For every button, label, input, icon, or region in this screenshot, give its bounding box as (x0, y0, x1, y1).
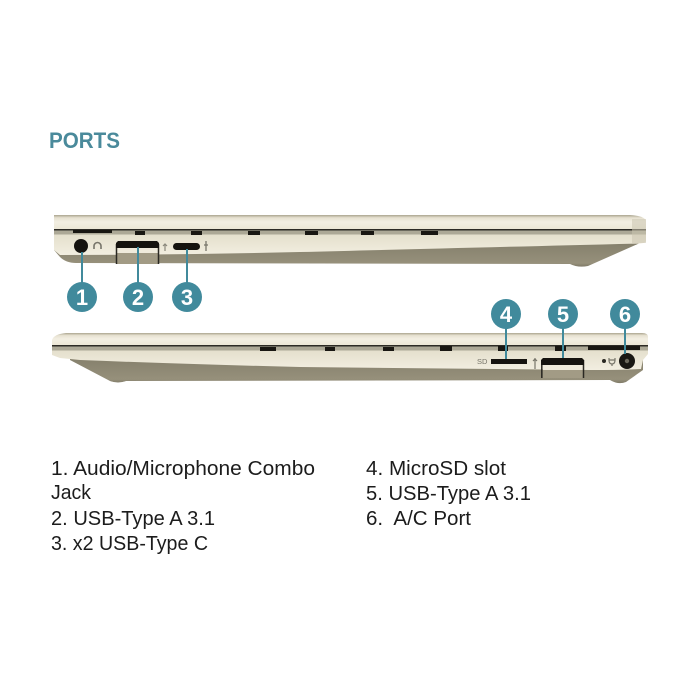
port list: left column: Jack (51, 482, 92, 504)
laptop base (54, 234, 646, 255)
callout 3 (172, 249, 202, 312)
callout 5: 5 (557, 302, 569, 327)
hinge gap (54, 229, 646, 230)
port list: right column: 4. MicroSD slot (366, 458, 506, 480)
laptop underside (54, 243, 640, 267)
laptop side view: right ports (52, 333, 648, 383)
callout 4: 4 (500, 302, 513, 327)
callout 5 (548, 299, 578, 358)
port list: left column: 2. USB-Type A 3.1 (51, 508, 215, 530)
icon: power (609, 358, 615, 366)
hinge vents (260, 346, 640, 351)
hinge vents (73, 230, 438, 235)
port list: right column: 5. USB-Type A 3.1 (366, 483, 531, 505)
port list: left column: 3. x2 USB-Type C (51, 533, 208, 555)
laptop base (52, 350, 648, 370)
callout 1 (67, 252, 97, 312)
laptop lid (54, 215, 646, 229)
microSD slot (491, 359, 527, 364)
icon: USB (163, 244, 167, 251)
indicator light (602, 359, 606, 363)
laptop side view: left ports (54, 215, 646, 267)
icon: Thunderbolt USB (204, 241, 208, 251)
SD label: SD (477, 357, 488, 366)
port list: right column (366, 458, 531, 530)
laptop lid (52, 333, 648, 345)
port list: right column: 6. A/C Port (366, 508, 471, 530)
callout 2 (123, 247, 153, 312)
heading: PORTS: PORTS (49, 128, 120, 153)
USB-A port right (541, 358, 584, 378)
A/C port (619, 353, 635, 369)
callout 6: 6 (619, 302, 631, 327)
hinge gap (52, 345, 648, 346)
icon: USB (533, 358, 537, 369)
USB-A port left (116, 241, 159, 264)
port list: left column: 1. Audio/Microphone Combo (51, 458, 315, 480)
callout 1: 1 (76, 285, 88, 310)
hinge edge highlight (632, 219, 646, 243)
callout 6 (610, 299, 640, 354)
callout 2: 2 (132, 285, 144, 310)
callout 4 (491, 299, 521, 359)
callout 3: 3 (181, 285, 193, 310)
USB-C port (173, 243, 200, 250)
port list: left column (51, 458, 315, 555)
icon: headphones (94, 243, 101, 249)
laptop underside (70, 358, 643, 383)
audio jack (74, 239, 88, 253)
